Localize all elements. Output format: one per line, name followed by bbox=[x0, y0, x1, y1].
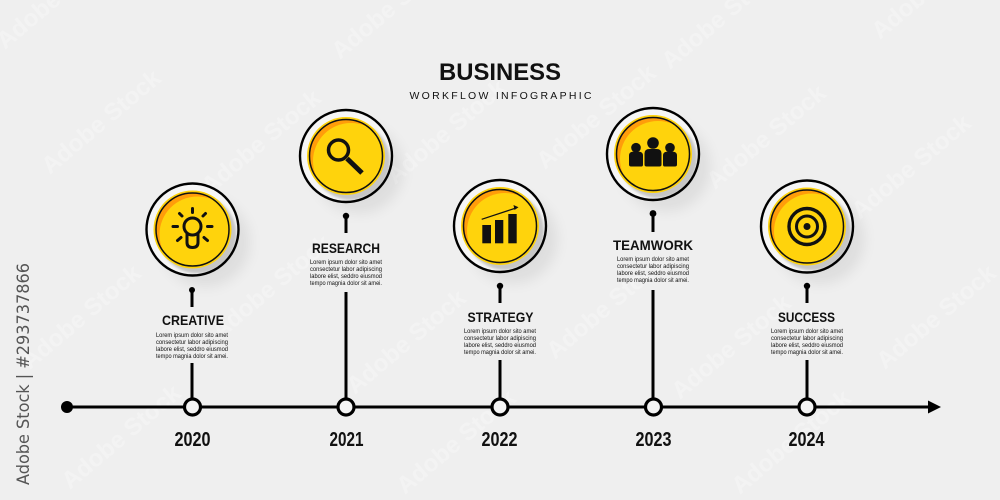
node bbox=[646, 399, 662, 415]
connector bbox=[189, 287, 195, 400]
watermark pattern: Adobe Stock bbox=[727, 384, 857, 500]
node bbox=[184, 399, 200, 415]
text block: consectetur labor adipiscing bbox=[617, 263, 689, 270]
connector bbox=[343, 213, 349, 400]
text block: consectetur labor adipiscing bbox=[310, 266, 382, 273]
text block bbox=[310, 259, 382, 287]
text block: Lorem ipsum dolor sito amet bbox=[464, 328, 536, 335]
heading: STRATEGY bbox=[468, 309, 534, 325]
text block: labore elist, seddro eiusmod bbox=[771, 342, 843, 349]
year: 2021 bbox=[330, 429, 364, 451]
watermark pattern: Adobe Stock bbox=[542, 249, 672, 365]
heading: CREATIVE bbox=[162, 312, 224, 328]
connector bbox=[650, 210, 656, 400]
text block: tempo magnia dolor sit amei. bbox=[771, 349, 843, 356]
step: success 2024 bbox=[761, 180, 864, 451]
watermark pattern: Adobe Stock bbox=[847, 109, 977, 225]
watermark pattern: Adobe Stock bbox=[207, 229, 337, 345]
text block: labore elist, seddro eiusmod bbox=[156, 346, 228, 353]
text block: tempo magnia dolor sit amei. bbox=[464, 349, 536, 356]
text block: labore elist, seddro eiusmod bbox=[310, 273, 382, 280]
timeline arrow bbox=[61, 400, 941, 414]
text block bbox=[617, 256, 689, 284]
watermark pattern: Adobe Stock bbox=[197, 84, 327, 200]
step: strategy 2022 bbox=[454, 180, 557, 451]
step: creative 2020 bbox=[146, 184, 250, 451]
year: 2023 bbox=[636, 429, 672, 451]
watermark pattern: Adobe Stock bbox=[57, 379, 187, 495]
icon: bar chart badge bbox=[454, 180, 557, 283]
connector bbox=[804, 283, 810, 400]
icon: magnifier badge bbox=[300, 110, 403, 213]
node bbox=[338, 399, 354, 415]
text block bbox=[771, 328, 843, 356]
watermark pattern: Adobe Stock bbox=[382, 74, 512, 190]
text block: Lorem ipsum dolor sito amet bbox=[310, 259, 382, 266]
text block: consectetur labor adipiscing bbox=[464, 335, 536, 342]
year: 2024 bbox=[788, 429, 825, 451]
icon: team badge bbox=[607, 108, 710, 211]
text block bbox=[464, 328, 536, 356]
text block: tempo magnia dolor sit amei. bbox=[156, 353, 228, 360]
text block: consectetur labor adipiscing bbox=[156, 339, 228, 346]
watermark pattern: Adobe Stock bbox=[17, 259, 147, 375]
icon: target badge bbox=[761, 180, 864, 284]
watermark pattern: Adobe Stock bbox=[392, 384, 522, 500]
year: 2020 bbox=[174, 429, 210, 451]
watermark pattern: Adobe Stock bbox=[37, 64, 167, 180]
title: BUSINESS bbox=[439, 59, 561, 86]
watermark pattern: Adobe Stock bbox=[872, 259, 1000, 375]
vertical credit: Adobe Stock | #293737866 bbox=[14, 263, 33, 485]
step: research 2021 bbox=[300, 110, 403, 451]
heading: SUCCESS bbox=[778, 309, 835, 325]
text block: tempo magnia dolor sit amei. bbox=[310, 280, 382, 287]
heading: TEAMWORK bbox=[613, 237, 693, 253]
watermark pattern: Adobe Stock bbox=[532, 59, 662, 175]
text block: Lorem ipsum dolor sito amet bbox=[156, 332, 228, 339]
text block: Lorem ipsum dolor sito amet bbox=[617, 256, 689, 263]
text block: labore elist, seddro eiusmod bbox=[617, 270, 689, 277]
connector bbox=[497, 283, 503, 400]
text block: consectetur labor adipiscing bbox=[771, 335, 843, 342]
text block: Lorem ipsum dolor sito amet bbox=[771, 328, 843, 335]
text block bbox=[156, 332, 228, 360]
node bbox=[799, 399, 815, 415]
step: teamwork 2023 bbox=[607, 108, 710, 451]
icon: light bulb badge bbox=[146, 184, 250, 286]
subtitle: WORKFLOW INFOGRAPHIC bbox=[410, 90, 592, 102]
year: 2022 bbox=[482, 429, 518, 451]
watermark pattern: Adobe Stock bbox=[342, 284, 472, 400]
text block: tempo magnia dolor sit amei. bbox=[617, 277, 689, 284]
watermark pattern: Adobe Stock bbox=[667, 289, 797, 405]
node bbox=[492, 399, 508, 415]
text block: labore elist, seddro eiusmod bbox=[464, 342, 536, 349]
heading: RESEARCH bbox=[312, 240, 380, 256]
watermark pattern: Adobe Stock bbox=[702, 79, 832, 195]
